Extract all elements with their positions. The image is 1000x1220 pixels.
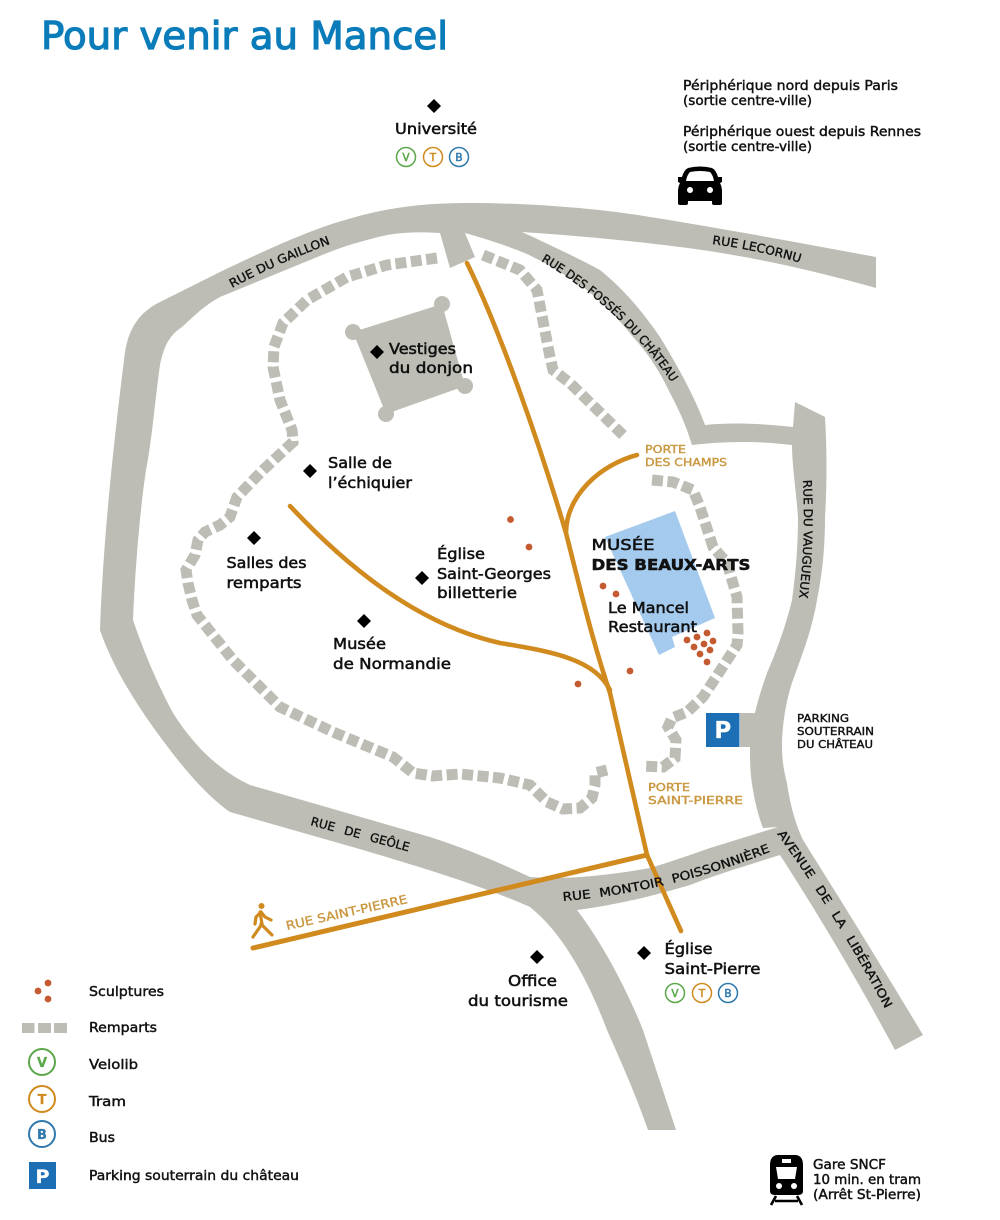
label: Musée des Beaux-Arts: MUSÉE: [592, 535, 654, 554]
label: Église Saint-Georges billetterie: [437, 544, 551, 602]
icon: pedestrian: [253, 903, 272, 937]
icon: train: [770, 1155, 803, 1205]
icon: parking sign on map: [706, 713, 740, 747]
sculptures: [507, 516, 716, 687]
street: avenue de la Libération: AVENUE DE LA LIBÉRATION: [776, 832, 893, 1008]
legend item: sculptures: Sculptures: [89, 984, 164, 1000]
legend item: remparts: Remparts: [89, 1020, 157, 1036]
road directions text: [683, 78, 921, 155]
label: Le Mancel Restaurant: Le Mancel: [608, 599, 689, 617]
direction: from Paris: [683, 78, 898, 109]
rampart: museum section: [642, 480, 738, 767]
direction: from Paris: Périphérique nord depuis Paris: [683, 78, 898, 94]
legend item: parking: [29, 1162, 299, 1189]
tram and walking routes: [253, 263, 681, 948]
branch through the west: [290, 506, 610, 690]
badge: bus: B: [455, 152, 463, 164]
label: Université: Université: [395, 120, 477, 138]
direction: from Rennes: [683, 124, 921, 155]
direction: from Paris: (sortie centre-ville): [683, 93, 812, 109]
legend item: remparts: [22, 1020, 157, 1036]
legend item: bus: Bus: [89, 1130, 115, 1146]
transport badges: Université: [396, 148, 468, 166]
gate labels: [645, 443, 743, 807]
label: Église Saint-Georges billetterie: Église: [437, 544, 485, 563]
legend item: sculptures: [35, 980, 164, 1002]
label: parking souterrain du château: SOUTERRAIN: [797, 725, 874, 738]
street: rue de Geôle: RUE DE GEÔLE: [310, 816, 410, 852]
museum building: [605, 511, 715, 655]
street: rue Lecornu: RUE LECORNU: [713, 235, 802, 262]
label: Salle de l'échiquier: l’échiquier: [328, 474, 413, 492]
label: Office du tourisme: du tourisme: [468, 992, 568, 1010]
legend item: parking: P: [36, 1166, 50, 1188]
icon: parking sign on map: P: [714, 718, 731, 744]
legend item: velolib: V: [37, 1056, 47, 1071]
legend item: tram: T: [38, 1093, 47, 1108]
label: Musée des Beaux-Arts: [592, 535, 750, 574]
place labels: [226, 120, 760, 1010]
label: Église Saint-Pierre: Église: [664, 939, 712, 958]
train station text: 10 min. en tram: [813, 1172, 921, 1188]
location markers: [247, 99, 651, 964]
icon: car: [678, 166, 722, 205]
label: Porte Saint-Pierre: PORTE: [648, 781, 690, 794]
label: Église Saint-Georges billetterie: Saint-Georges: [437, 565, 551, 583]
legend item: tram: [29, 1086, 126, 1112]
label: Vestiges du donjon: [389, 340, 473, 377]
branch to porte des champs: [566, 455, 637, 532]
label: Salles des remparts: remparts: [226, 574, 302, 592]
train station text: [813, 1157, 921, 1203]
title: Pour venir au Mancel: [41, 14, 448, 58]
label: Salle de l'échiquier: [328, 454, 413, 492]
street: rue Saint-Pierre: RUE SAINT-PIERRE: [286, 894, 408, 930]
street: rue Montoir Poissonnière: RUE MONTOIR POISSONNIÈRE: [563, 844, 770, 902]
label: Porte Saint-Pierre: [648, 781, 743, 807]
label: Porte des Champs: DES CHAMPS: [645, 456, 727, 469]
label: Église Saint-Pierre: Saint-Pierre: [664, 960, 760, 978]
direction: from Rennes: (sortie centre-ville): [683, 139, 812, 155]
label: Salle de l'échiquier: Salle de: [328, 454, 392, 472]
legend item: bus: [29, 1121, 115, 1147]
label: parking souterrain du château: [797, 712, 874, 751]
label: Porte Saint-Pierre: SAINT-PIERRE: [648, 794, 743, 807]
legend item: tram: Tram: [88, 1094, 126, 1110]
label: Porte des Champs: [645, 443, 727, 469]
transport badges: Saint-Pierre: [666, 984, 738, 1002]
legend item: velolib: Velolib: [89, 1057, 138, 1073]
train station text: Gare SNCF: [813, 1157, 886, 1173]
label: Office du tourisme: [468, 972, 568, 1010]
label: Vestiges du donjon: Vestiges: [389, 340, 456, 358]
badge: bus: B: [724, 988, 732, 1000]
label: Église Saint-Pierre: [664, 939, 760, 978]
rampart: north-east section: [483, 255, 625, 437]
legend item: velolib: [29, 1049, 138, 1075]
label: Salles des remparts: [226, 554, 306, 592]
label: Le Mancel Restaurant: [608, 599, 697, 636]
label: Salles des remparts: Salles des: [226, 554, 306, 572]
main route: [467, 263, 681, 931]
street: rue du Gaillon: RUE DU GAILLON: [228, 236, 330, 288]
street: rue des Fossés du Château: RUE DES FOSSÉS DU CHÂTEAU: [542, 254, 678, 381]
label: Le Mancel Restaurant: Restaurant: [608, 618, 697, 636]
tower ruins: vestiges du donjon: [345, 296, 473, 422]
label: Vestiges du donjon: du donjon: [389, 359, 473, 377]
street: rue du Vaugueux: RUE DU VAUGUEUX: [798, 480, 813, 598]
label: Porte des Champs: PORTE: [645, 443, 686, 456]
label: Musée de Normandie: Musée: [333, 635, 386, 653]
legend item: bus: B: [37, 1128, 47, 1143]
rampart: west circuit: [186, 258, 607, 809]
label: Musée de Normandie: de Normandie: [333, 655, 451, 673]
rue Saint-Pierre route: [253, 855, 647, 948]
road network: [100, 203, 923, 1130]
label: Musée des Beaux-Arts: DES BEAUX-ARTS: [592, 556, 750, 574]
label: Office du tourisme: Office: [508, 972, 557, 990]
ramparts: [186, 255, 738, 809]
direction: from Rennes: Périphérique ouest depuis Rennes: [683, 124, 921, 140]
train station text: (Arrêt St-Pierre): [813, 1187, 921, 1203]
label: parking souterrain du château: DU CHÂTEAU: [797, 738, 873, 751]
badge: tram: T: [429, 152, 437, 164]
label: Église Saint-Georges billetterie: billetterie: [437, 584, 517, 602]
legend: [22, 980, 299, 1189]
legend item: parking: Parking souterrain du château: [89, 1168, 299, 1184]
badge: velolib: V: [402, 152, 410, 164]
badge: tram: T: [698, 988, 706, 1000]
label: Musée de Normandie: [333, 635, 451, 673]
label: parking souterrain du château: PARKING: [797, 712, 849, 725]
badge: velolib: V: [671, 988, 679, 1000]
street labels: [228, 235, 893, 1008]
